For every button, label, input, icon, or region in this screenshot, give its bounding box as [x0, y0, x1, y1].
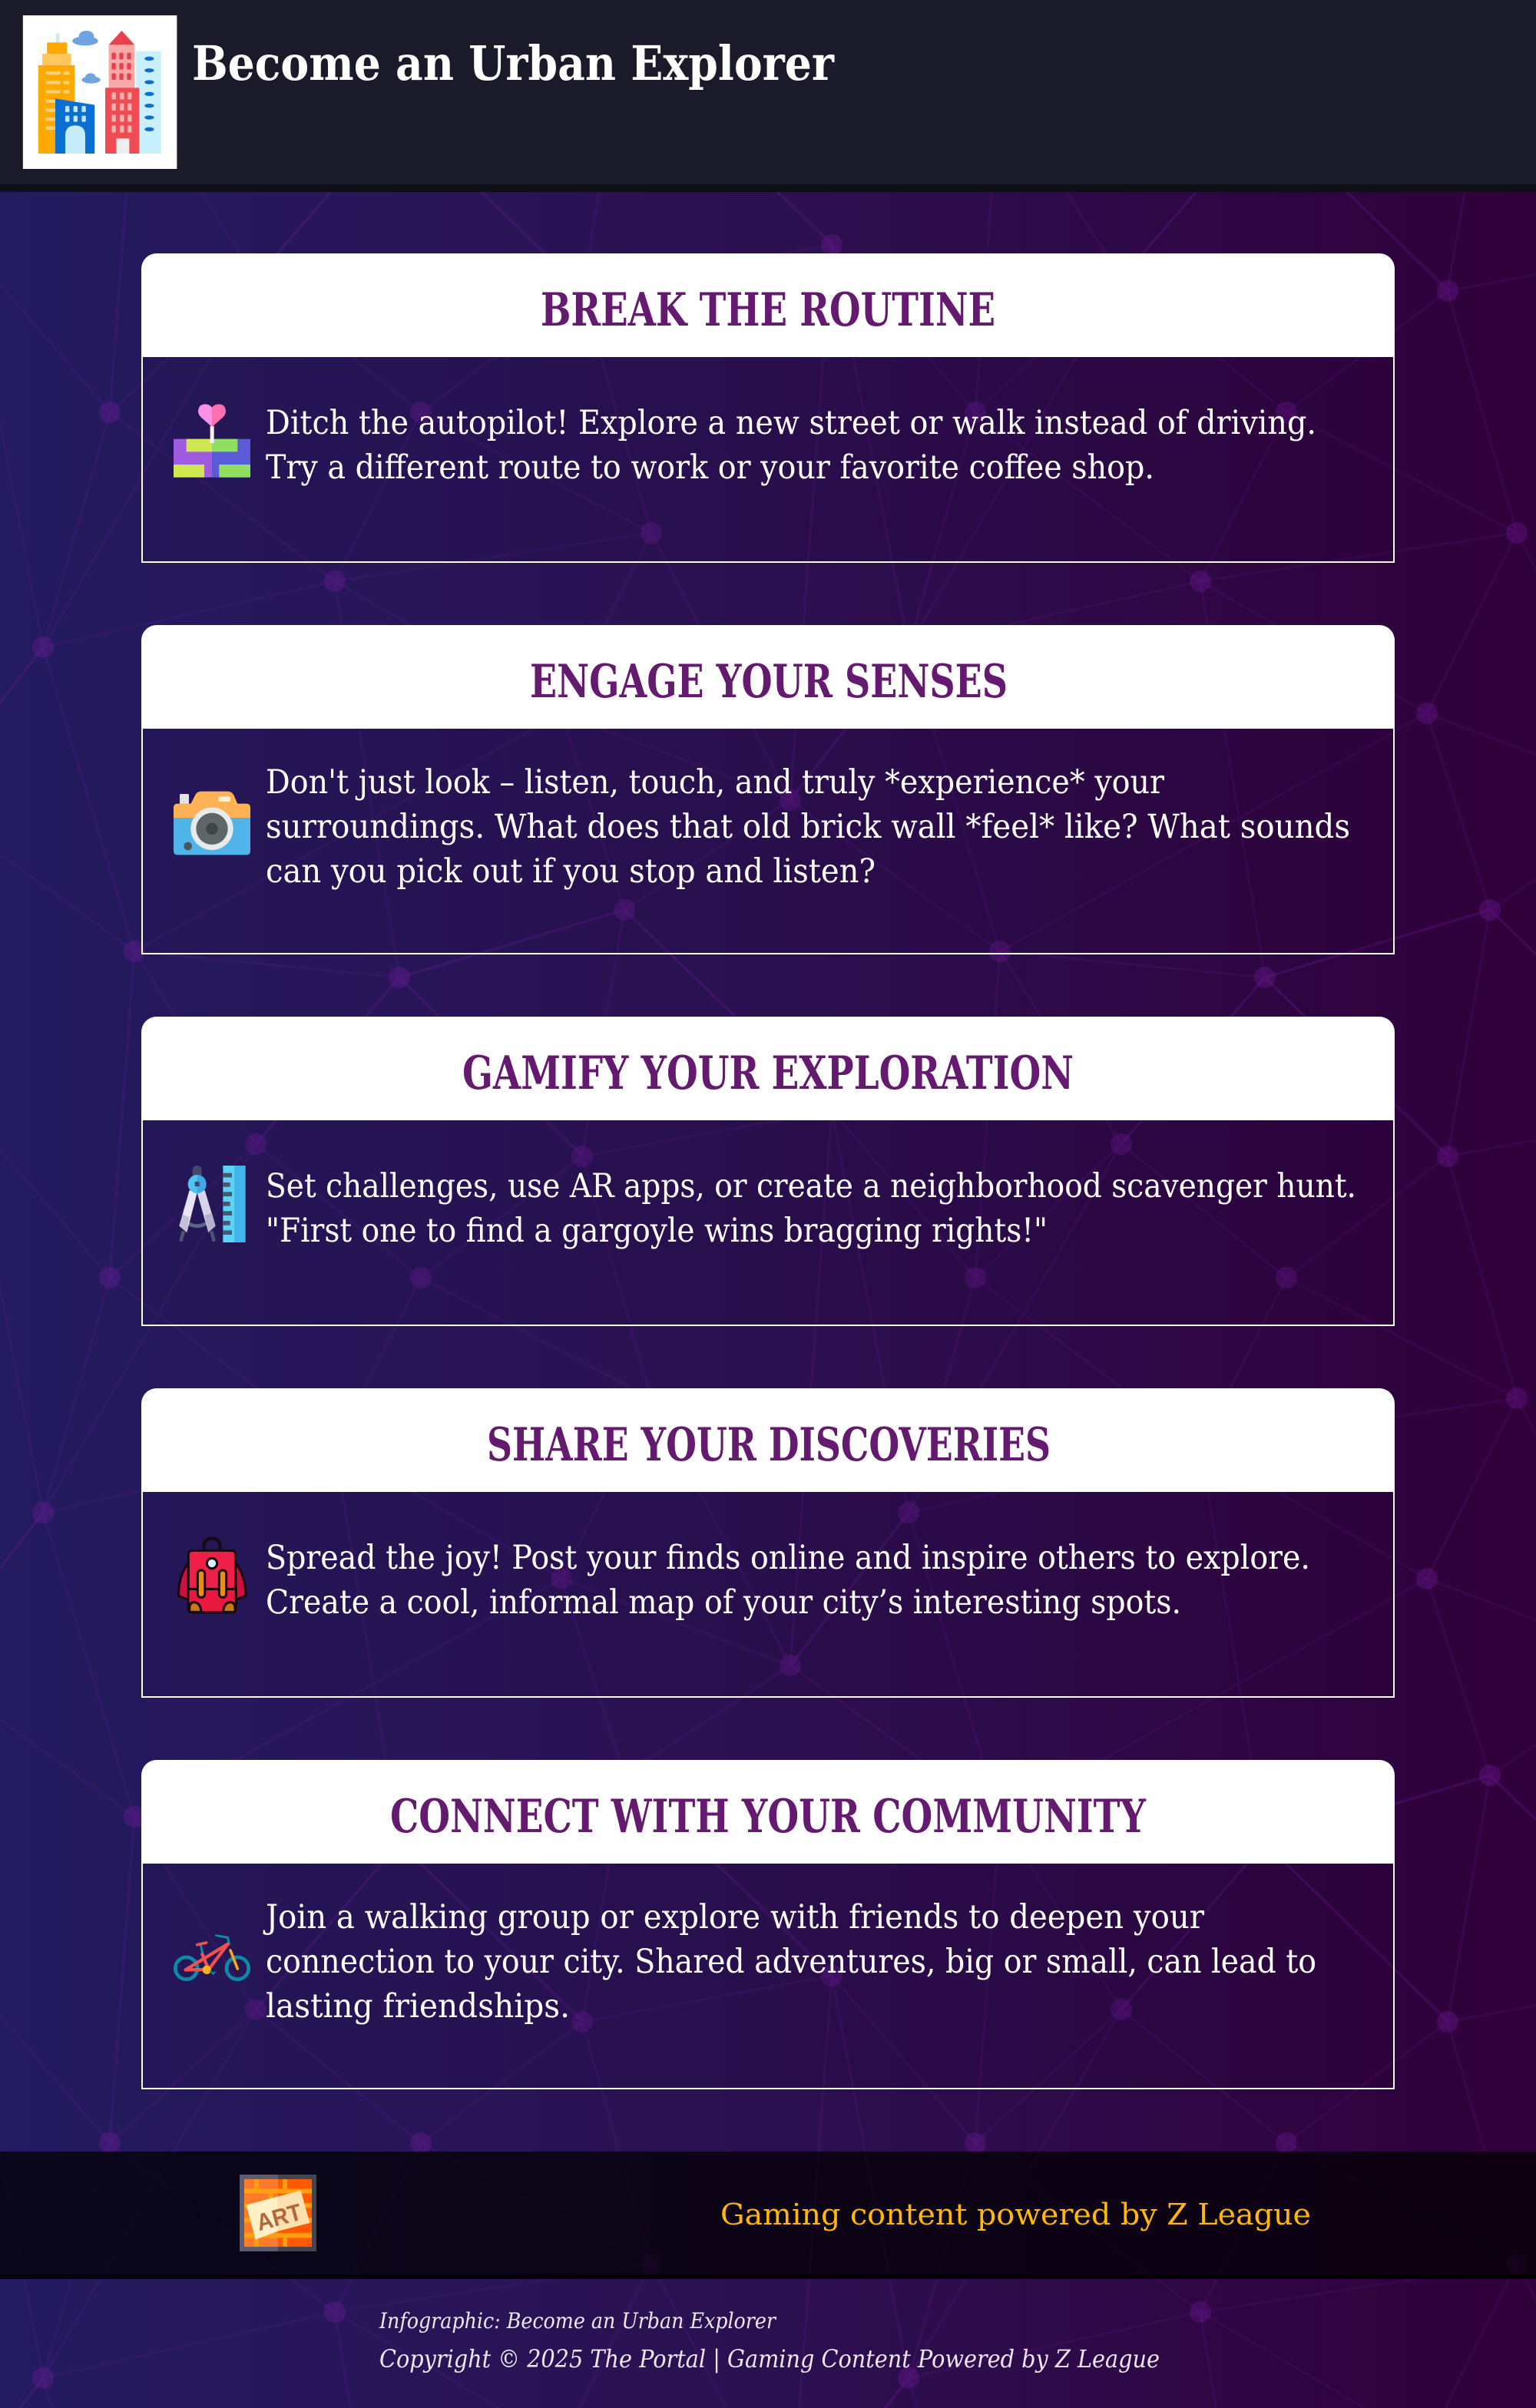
icon: bicycle	[175, 1936, 249, 1980]
icon: compass and ruler	[179, 1166, 246, 1242]
body text: Set challenges, use AR apps, or create a neighborhood scavenger hunt.	[266, 1167, 1356, 1206]
body text	[266, 404, 1316, 487]
header bar	[0, 0, 1536, 192]
panel: engage your senses	[141, 625, 1395, 954]
icon: camera	[174, 792, 250, 855]
sponsor band	[0, 2152, 1536, 2279]
body text	[266, 1539, 1310, 1622]
body text: Don't just look – listen, touch, and truly *experience* your	[266, 763, 1164, 802]
body text: connection to your city. Shared adventures, big or small, can lead to	[266, 1943, 1316, 1981]
heading: BREAK THE ROUTINE	[541, 283, 995, 337]
icon: art poster on brick wall: ART	[253, 2199, 305, 2236]
body text: Ditch the autopilot! Explore a new street or walk instead of driving.	[266, 404, 1316, 442]
body text: "First one to find a gargoyle wins bragging rights!"	[266, 1212, 1048, 1250]
panel: gamify your exploration	[141, 1017, 1395, 1325]
body text	[266, 763, 1350, 891]
heading: ENGAGE YOUR SENSES	[530, 655, 1008, 709]
icon: city logo	[23, 15, 177, 169]
footer credits: Copyright © 2025 The Portal | Gaming Content Powered by Z League	[379, 2344, 1160, 2373]
sponsor text: Gaming content powered by Z League	[720, 2198, 1311, 2231]
icon: art poster on brick wall	[240, 2175, 316, 2251]
heading: GAMIFY YOUR EXPLORATION	[462, 1047, 1074, 1100]
heading: CONNECT WITH YOUR COMMUNITY	[390, 1790, 1147, 1844]
panel: connect with your community	[141, 1760, 1395, 2089]
footer credits	[379, 2308, 1160, 2373]
body text: Create a cool, informal map of your city’s interesting spots.	[266, 1583, 1181, 1622]
icon: backpack	[179, 1538, 246, 1612]
title: Become an Urban Explorer	[192, 35, 835, 91]
body text: lasting friendships.	[266, 1987, 570, 2026]
body text: can you pick out if you stop and listen?	[266, 852, 876, 891]
body text	[266, 1167, 1356, 1250]
body text	[263, 1898, 1316, 2026]
body text: surroundings. What does that old brick wall *feel* like? What sounds	[266, 808, 1350, 846]
heading: SHARE YOUR DISCOVERIES	[487, 1418, 1051, 1472]
icon: map with heart pin	[174, 404, 250, 478]
panel: break the routine	[141, 253, 1395, 562]
body text: Try a different route to work or your favorite coffee shop.	[266, 448, 1154, 487]
body text: Spread the joy! Post your finds online and inspire others to explore.	[266, 1539, 1310, 1577]
body text: Join a walking group or explore with friends to deepen your	[263, 1898, 1204, 1937]
footer credits: Infographic: Become an Urban Explorer	[379, 2308, 776, 2334]
panel: share your discoveries	[141, 1388, 1395, 1697]
